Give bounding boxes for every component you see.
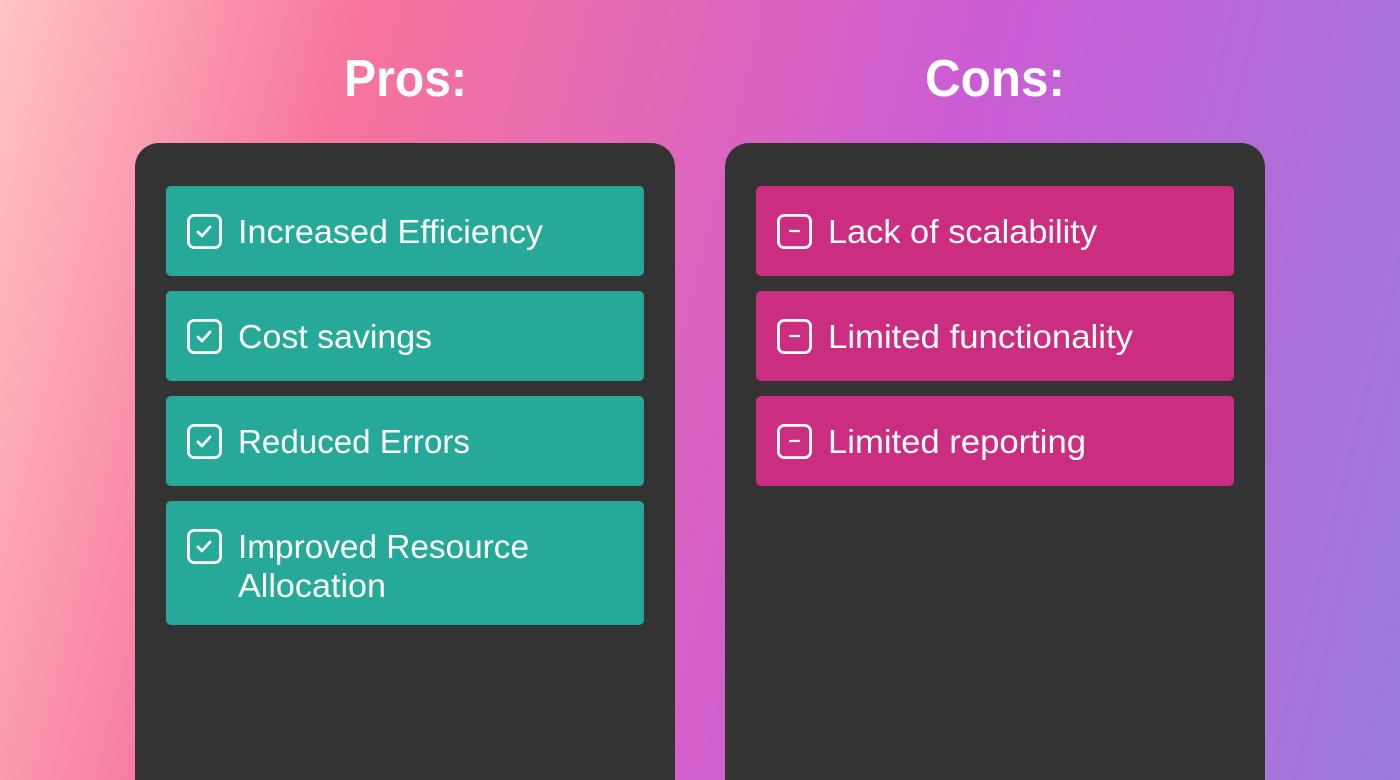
item: Limited functionality [756,291,1234,381]
label: Improved Resource Allocation [238,528,529,604]
label: Lack of scalability: Lack of scalability [828,213,1098,250]
item: Limited reporting [756,396,1234,486]
label: Increased Efficiency: Increased Efficiency [238,213,544,250]
label: Reduced Errors: Reduced Errors [238,423,470,460]
icon: minus box [778,425,811,458]
panel: pros [135,143,675,780]
label: Improved Resource Allocation: Improved Resource [238,528,529,565]
label: Limited reporting: Limited reporting [828,423,1086,460]
item: Cost savings [166,291,644,381]
item: Lack of scalability [756,186,1234,276]
item: Increased Efficiency [166,186,644,276]
icon: minus box [778,320,811,353]
item: Improved Resource Allocation [166,501,644,625]
label: Limited functionality: Limited functionality [828,318,1134,355]
icon: check box [188,215,221,248]
item: Reduced Errors [166,396,644,486]
heading: Cons: Cons: [925,50,1065,108]
heading: Pros: Pros: [344,50,467,108]
label: Cost savings: Cost savings [238,318,432,355]
icon: check box [188,320,221,353]
icon: minus box [778,215,811,248]
icon: check box [188,530,221,563]
label: Improved Resource Allocation: Allocation [238,567,386,604]
panel: cons [725,143,1265,780]
icon: check box [188,425,221,458]
